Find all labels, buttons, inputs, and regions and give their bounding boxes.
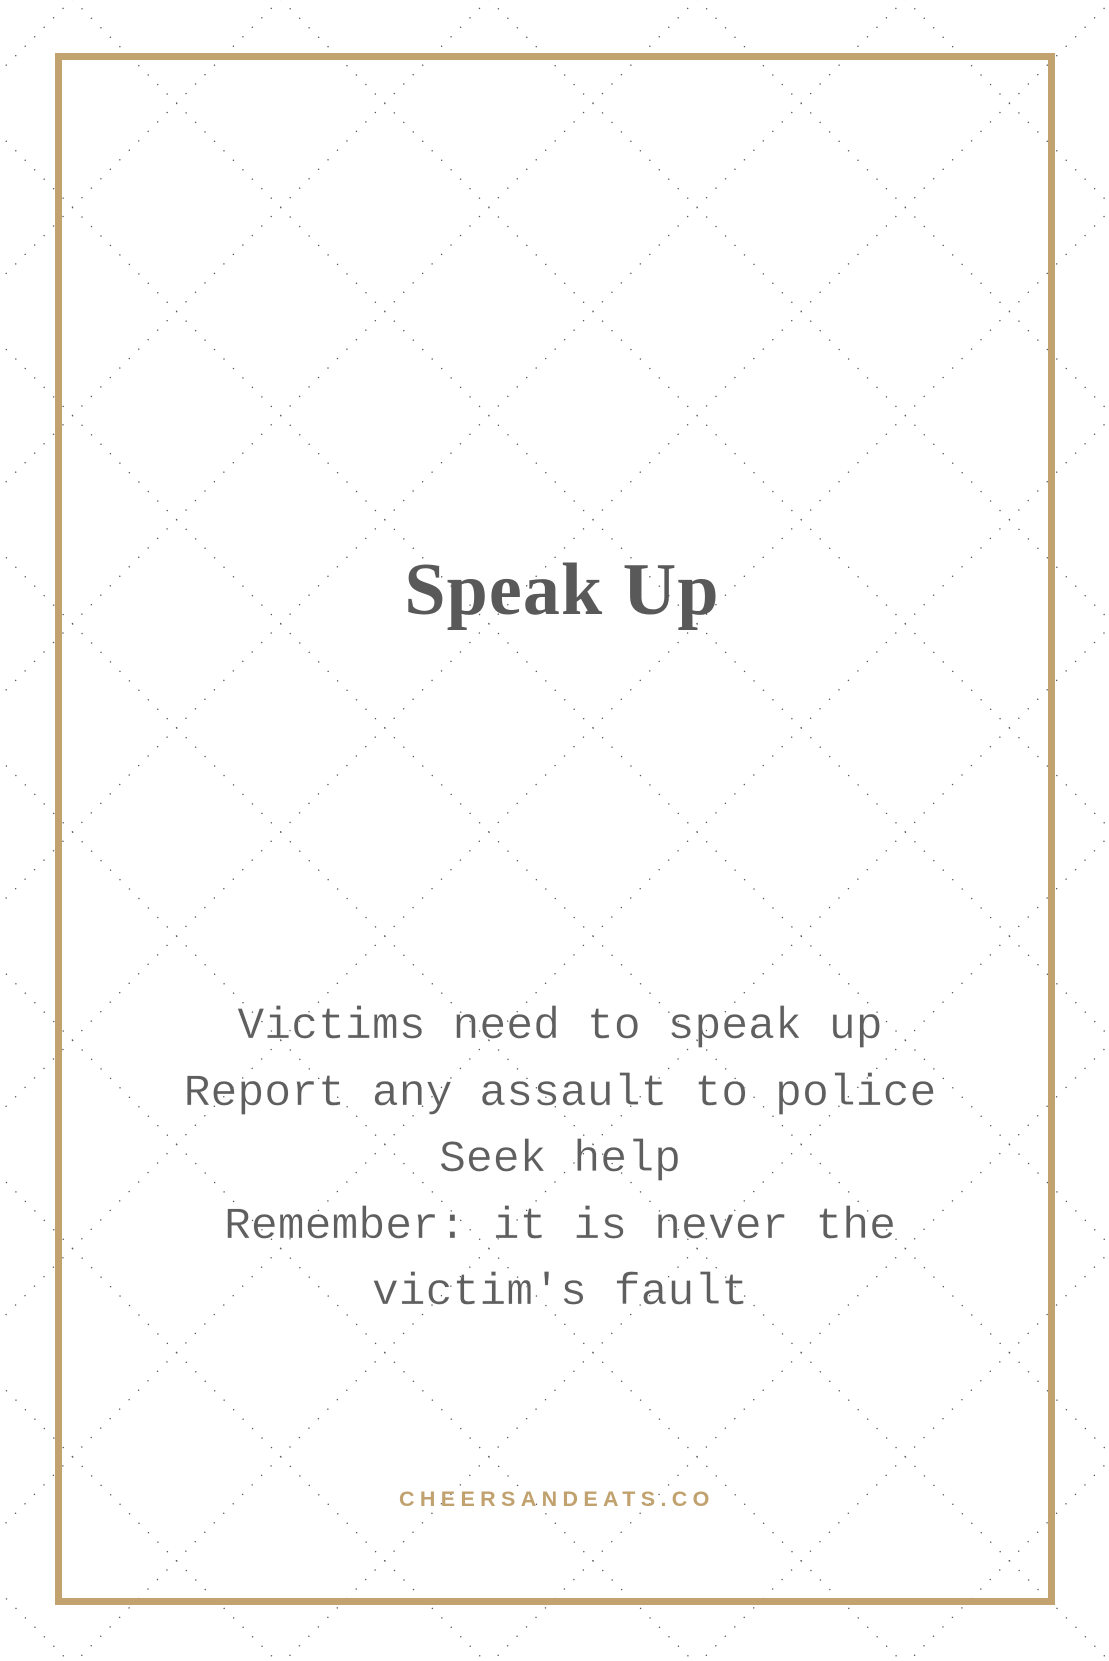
title: Speak Up	[404, 549, 720, 631]
body text: Victims need to speak up Report any assault to police Seek help Remember: it is never the victim's fault	[184, 1002, 936, 1318]
footer website: CHEERSANDEATS.CO	[399, 1487, 715, 1511]
